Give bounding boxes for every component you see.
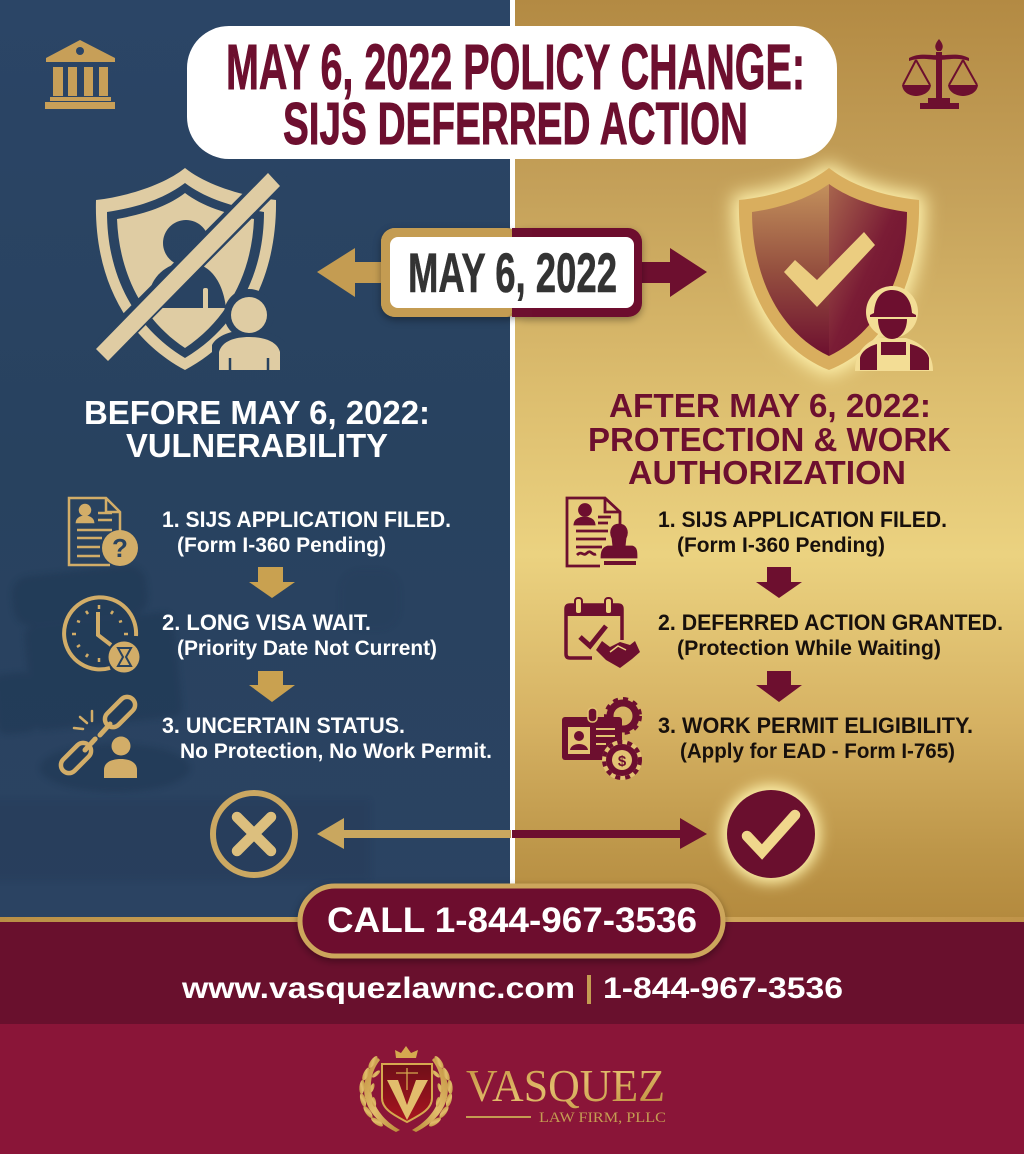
step 2 text, before (162, 610, 437, 660)
step 3 text, after: 3. WORK PERMIT ELIGIBILITY. (658, 713, 973, 738)
heading: before: VULNERABILITY (126, 427, 388, 464)
footer band (0, 1024, 1024, 1154)
icon: courthouse (45, 40, 115, 109)
arrow: comparison, to after (512, 818, 707, 849)
arrow: step 2 to 3, before (249, 671, 295, 702)
arrow: right, after (640, 248, 707, 297)
step 2 text, before: 2. LONG VISA WAIT. (162, 610, 371, 635)
heading: before (84, 394, 430, 464)
step 3 text, after (658, 713, 973, 763)
step 2 text, before: (Priority Date Not Current) (177, 637, 437, 660)
icon: calendar with handshake (566, 598, 640, 668)
icon: check in glowing circle (722, 785, 820, 883)
step 2 text, after: (Protection While Waiting) (677, 637, 941, 660)
arrow: step 1 to 2, before (249, 567, 295, 598)
icon: signed document with stamp (567, 498, 636, 566)
step 1 text, after (658, 507, 947, 557)
panel: before, navy background (0, 0, 511, 925)
arrow: step 2 to 3, after (756, 671, 802, 702)
icon: broken chain with person (58, 694, 138, 778)
logo crest (359, 1046, 453, 1132)
panel: after, gold background (514, 0, 1024, 925)
gold rule (0, 917, 1024, 922)
arrow: comparison, to before (317, 818, 511, 849)
arrow: step 1 to 2, after (756, 567, 802, 598)
logo subline: LAW FIRM, PLLC (539, 1110, 666, 1126)
heading: after: PROTECTION & WORK (588, 421, 951, 458)
step 1 text, before: (Form I-360 Pending) (177, 534, 386, 557)
date badge with arrows (317, 228, 707, 317)
logo: Vasquez Law Firm (359, 1046, 666, 1132)
title banner (187, 26, 837, 159)
icon: X in circle (213, 793, 295, 875)
website and phone line (181, 972, 843, 1005)
icon: ID card and gears (562, 699, 642, 780)
step 2 text, after (658, 610, 1003, 660)
call text: CALL 1-844-967-3536 (327, 901, 697, 940)
step 2 text, after: 2. DEFERRED ACTION GRANTED. (658, 610, 1003, 635)
heading: after: AUTHORIZATION (628, 454, 906, 491)
title line 2: SIJS DEFERRED ACTION (283, 91, 748, 157)
step 3 text, before: 3. UNCERTAIN STATUS. (162, 713, 405, 738)
step 3 text, after: (Apply for EAD - Form I-765) (680, 740, 955, 763)
icon: crossed-out shield with person (92, 164, 290, 372)
step 1 text, before: 1. SIJS APPLICATION FILED. (162, 507, 451, 532)
call button (300, 886, 723, 956)
heading: after (588, 387, 951, 491)
icon: scales of justice (902, 39, 978, 109)
step 3 text, before: No Protection, No Work Permit. (180, 740, 492, 763)
date label: MAY 6, 2022 (408, 241, 617, 304)
icon: document with question mark: ? (112, 533, 128, 563)
icon: document with question mark (69, 498, 138, 566)
website and phone line: 1-844-967-3536 (603, 972, 843, 1005)
website and phone line: www.vasquezlawnc.com (181, 972, 575, 1005)
heading: after: AFTER MAY 6, 2022: (609, 387, 931, 424)
step 1 text, before (162, 507, 451, 557)
contact band (0, 922, 1024, 1024)
centre divider (510, 0, 515, 920)
step 3 text, before (162, 713, 492, 763)
heading: before: BEFORE MAY 6, 2022: (84, 394, 430, 431)
icon: glowing shield with check and worker (733, 162, 933, 376)
step 1 text, after: 1. SIJS APPLICATION FILED. (658, 507, 947, 532)
step 1 text, after: (Form I-360 Pending) (677, 534, 885, 557)
icon: clock with hourglass (64, 597, 140, 672)
logo wordmark: VASQUEZ (466, 1060, 665, 1111)
icon: ID card and gears: $ (618, 753, 627, 770)
arrow: left, before (317, 248, 385, 297)
